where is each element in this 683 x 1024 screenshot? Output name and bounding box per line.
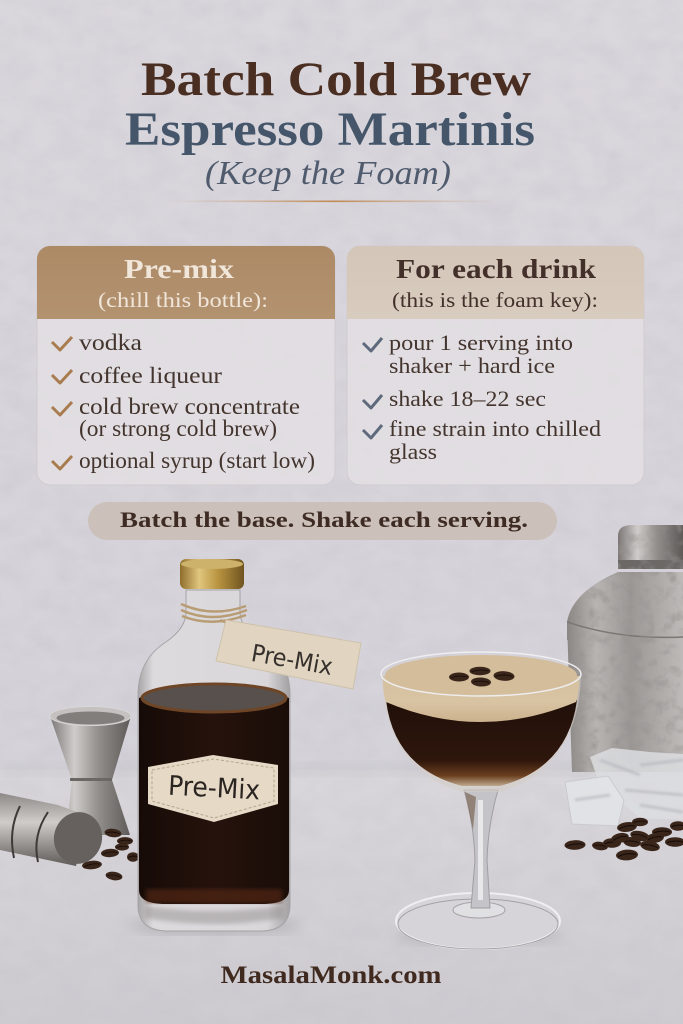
panel: for each drink [347,246,644,485]
jigger [50,706,131,835]
pre-mix checklist: (or strong cold brew) [79,416,277,441]
panel: pre-mix [37,246,335,485]
panel header: pre-mix: Pre-mix [124,254,235,284]
hanging tag: Pre-Mix [249,639,335,681]
banner [88,502,557,540]
bottle [129,559,299,934]
subtitle: (Keep the Foam) [205,155,451,192]
drink checklist: pour 1 serving into [389,330,573,355]
strainer lying on counter [0,793,108,869]
gold cap [180,559,244,589]
drink checklist: glass [389,439,437,464]
hanging tag [216,620,361,689]
pre-mix checklist: optional syrup (start low) [79,448,315,473]
panel header: for each drink: For each drink [396,254,596,284]
glass foot [396,893,560,949]
ice cubes [565,748,683,826]
bottle liquid [139,683,289,904]
glass bottle body [138,590,290,931]
drink checklist: shake 18–22 sec [389,386,546,411]
drink checklist [363,330,601,464]
coffee beans: right [564,818,683,861]
pre-mix checklist [52,330,315,473]
banner: Batch the base. Shake each serving. [120,507,528,532]
title [125,53,535,192]
title line: Batch Cold Brew: Batch Cold Brew [141,53,531,106]
pre-mix checklist: coffee liqueur [79,363,222,388]
shaker [567,525,683,772]
coffee bean garnish [449,667,515,687]
panel header: pre-mix [37,246,335,319]
panel header: for each drink [347,246,644,319]
bottle label: Pre-Mix [167,771,261,806]
twine [181,604,247,630]
foam layer [383,676,579,722]
coupe bowl [382,676,581,792]
pre-mix checklist: cold brew concentrate [79,394,300,419]
bottle label [148,755,278,822]
title line: Espresso Martinis: Espresso Martinis [125,103,535,156]
panel header: for each drink: (this is the foam key): [392,288,598,312]
martini glass [381,652,581,949]
drink checklist: shaker + hard ice [389,353,555,378]
coffee beans: left [81,828,139,882]
panel header: pre-mix: (chill this bottle): [98,288,268,312]
drink checklist: fine strain into chilled [389,416,601,441]
glass stem [464,790,498,908]
footer site name: MasalaMonk.com [220,962,442,989]
pre-mix checklist: vodka [79,330,142,355]
